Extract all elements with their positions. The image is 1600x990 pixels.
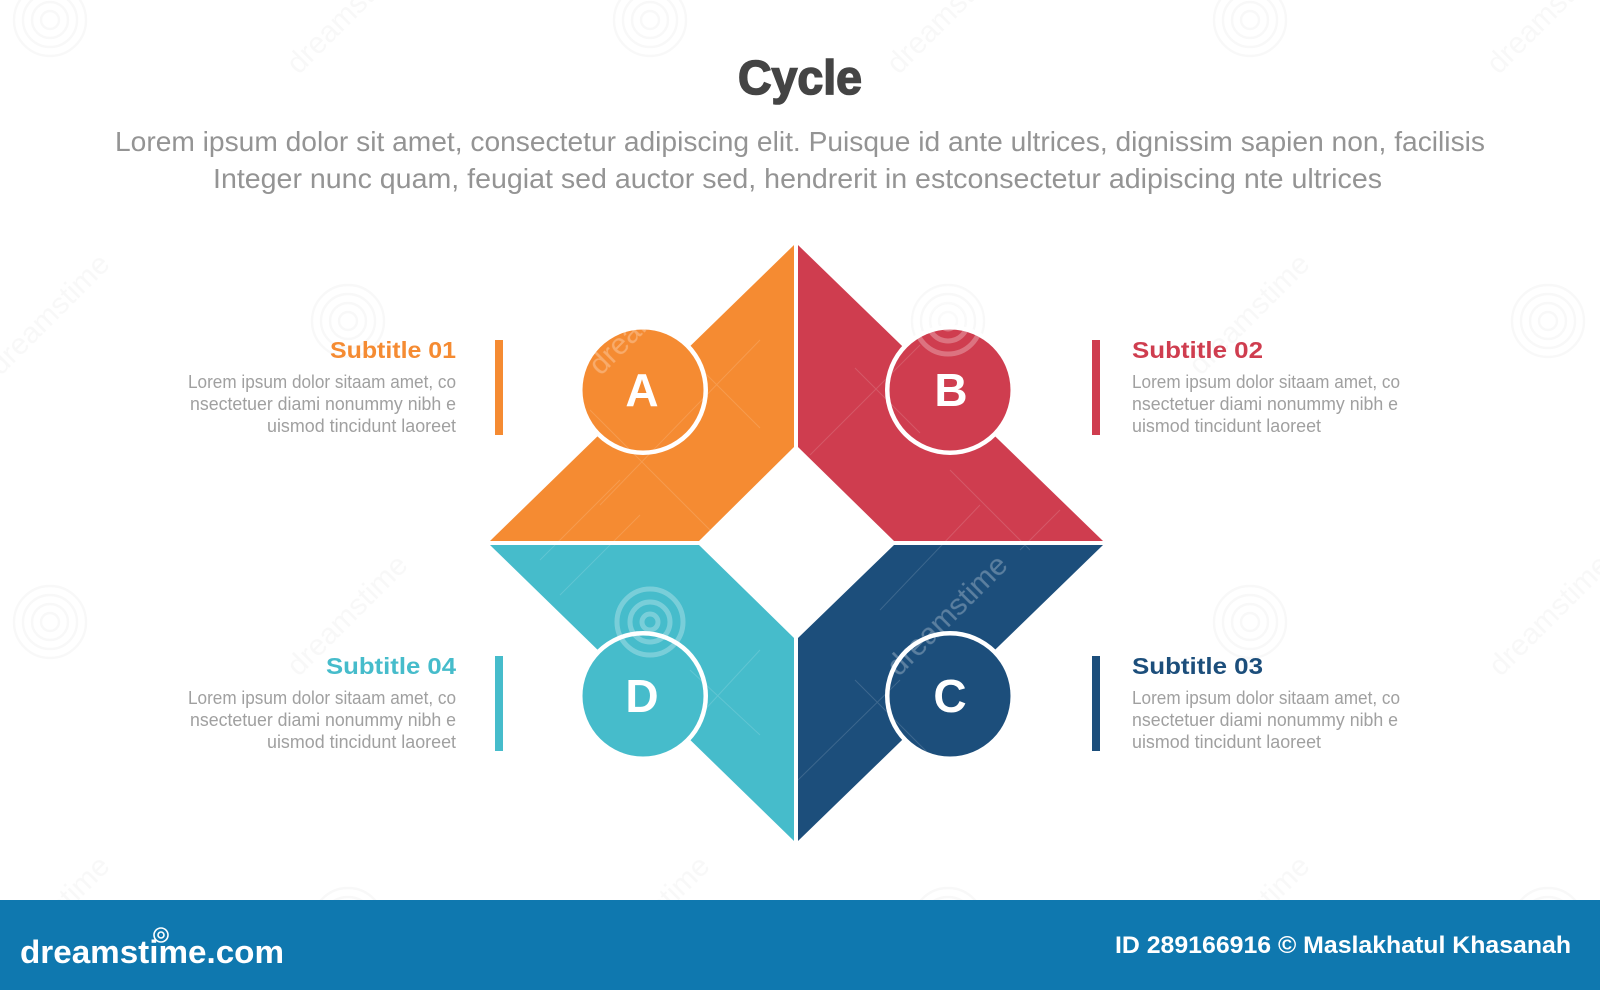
description text: [115, 126, 1485, 194]
footer bar: [0, 900, 1600, 990]
badge C: [885, 631, 1015, 761]
heading: Subtitle 02: [1132, 337, 1263, 363]
body: Lorem ipsum dolor sitaam amet, co: [1132, 688, 1400, 708]
body: [188, 372, 456, 436]
watermark overlay on diagram: dreamstime: [880, 548, 1014, 682]
body: Lorem ipsum dolor sitaam amet, co: [1132, 372, 1400, 392]
badge D: [578, 631, 708, 761]
logo spiral: [154, 928, 168, 942]
body: uismod tincidunt laoreet: [267, 416, 456, 436]
cycle diagram: [490, 245, 1103, 841]
watermark text: dreamstime: [280, 548, 414, 682]
body: uismod tincidunt laoreet: [1132, 416, 1321, 436]
body: uismod tincidunt laoreet: [267, 732, 456, 752]
body: nsectetuer diami nonummy nibh e: [1132, 394, 1398, 414]
item: subtitle 02: [1092, 337, 1400, 436]
body: Lorem ipsum dolor sitaam amet, co: [188, 372, 456, 392]
description text: Integer nunc quam, feugiat sed auctor sed, hendrerit in estconsectetur adipiscing nte ultrices: [213, 163, 1382, 194]
body: Lorem ipsum dolor sitaam amet, co: [188, 688, 456, 708]
accent bar: [495, 340, 503, 435]
body: [1132, 688, 1400, 752]
body: nsectetuer diami nonummy nibh e: [190, 394, 456, 414]
description text: Lorem ipsum dolor sit amet, consectetur adipiscing elit. Puisque id ante ultrices, dignissim sapien non, facilisis: [115, 126, 1485, 157]
item: subtitle 04: [188, 653, 503, 752]
watermark overlay on diagram: dreamstime: [582, 247, 716, 381]
body: [188, 688, 456, 752]
accent bar: [495, 656, 503, 751]
badge C: C: [933, 670, 967, 722]
heading: Subtitle 03: [1132, 653, 1263, 679]
segment C navy: [798, 545, 1103, 841]
badge B: [885, 325, 1015, 455]
body: [1132, 372, 1400, 436]
watermark text: dreamstime: [1182, 247, 1316, 381]
watermark text: dreamstime: [1182, 849, 1316, 983]
badge A: A: [625, 364, 659, 416]
badge A: [578, 325, 708, 455]
watermark overlay on diagram: [540, 247, 1060, 780]
body: nsectetuer diami nonummy nibh e: [190, 710, 456, 730]
segment D teal: [490, 545, 794, 841]
accent bar: [1092, 340, 1100, 435]
footer logo: dreamstime.com: [20, 934, 284, 970]
item: subtitle 01: [188, 337, 503, 436]
body: nsectetuer diami nonummy nibh e: [1132, 710, 1398, 730]
segment A orange: [490, 245, 794, 541]
title: Cycle: [738, 52, 862, 105]
badge B: B: [934, 364, 968, 416]
watermark text: dreamstime: [582, 849, 716, 983]
footer credit: ID 289166916 © Maslakhatul Khasanah: [1115, 932, 1571, 959]
item: subtitle 03: [1092, 653, 1400, 752]
body: uismod tincidunt laoreet: [1132, 732, 1321, 752]
segment B red: [798, 245, 1103, 541]
heading: Subtitle 04: [326, 653, 456, 679]
accent bar: [1092, 656, 1100, 751]
heading: Subtitle 01: [330, 337, 456, 363]
badge D: D: [625, 670, 659, 722]
